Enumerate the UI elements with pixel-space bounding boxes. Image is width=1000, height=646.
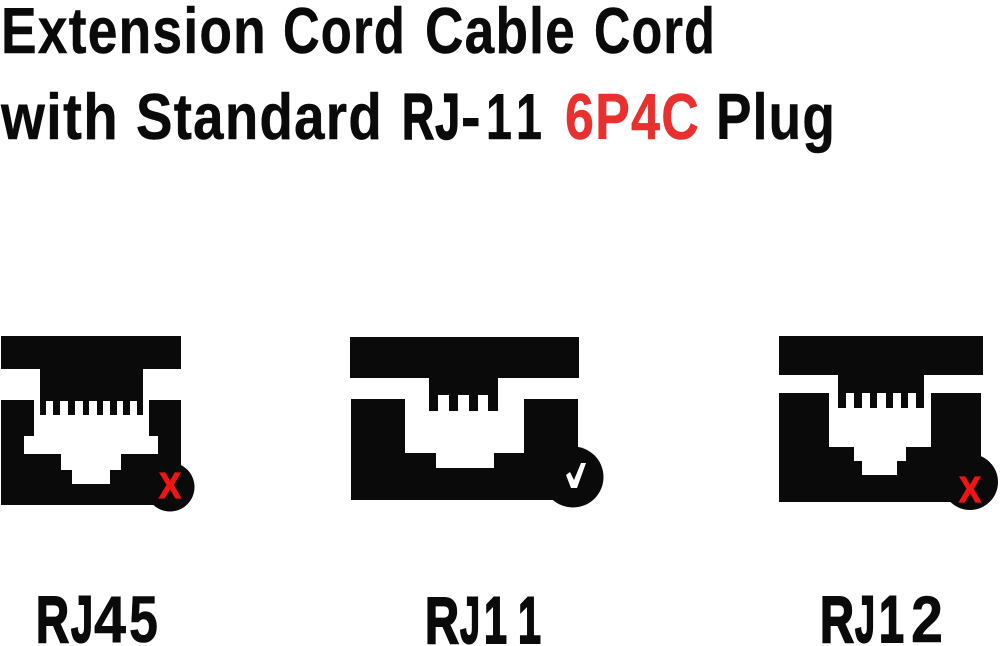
label: RJ11 (425, 583, 541, 646)
icon: RJ11 connector (350, 337, 604, 508)
badge: not compatible: X (959, 469, 981, 510)
title: RJ (402, 80, 461, 153)
badge: not compatible (146, 462, 194, 512)
title: Plug (716, 80, 836, 153)
badge: not compatible (942, 454, 998, 510)
title: 1 (516, 80, 543, 153)
title: with (0, 80, 119, 153)
label: RJ12 (820, 582, 943, 646)
badge: not compatible: X (159, 465, 181, 506)
title: 1 (486, 80, 513, 153)
badge: compatible (542, 446, 604, 508)
icon: RJ45 connector (1, 336, 194, 512)
title: Standard (136, 80, 383, 153)
icon: RJ12 connector (779, 336, 998, 510)
label: RJ45 (36, 582, 158, 646)
title: 6P4C (565, 80, 700, 153)
title: - (461, 80, 482, 153)
title (0, 0, 836, 153)
